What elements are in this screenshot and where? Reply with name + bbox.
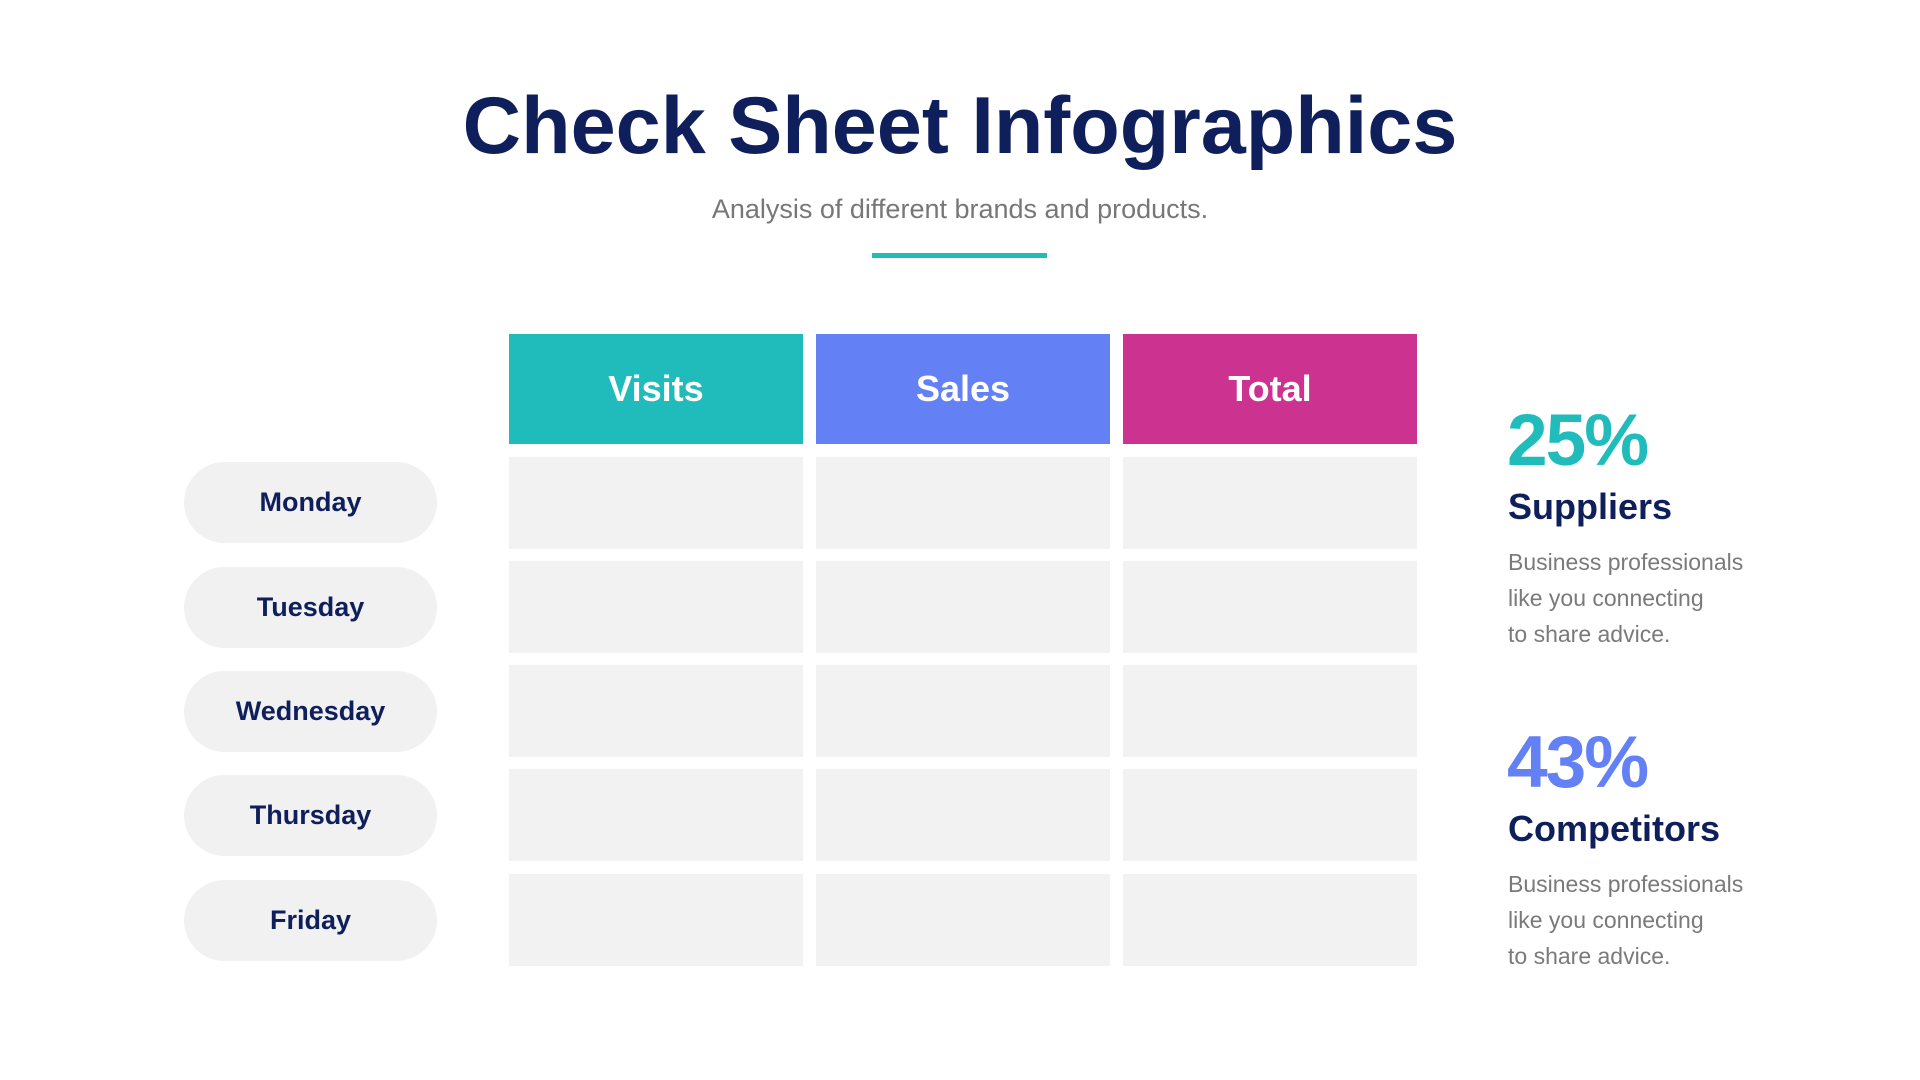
row label: Tuesday: Tuesday xyxy=(257,592,364,622)
row label: Wednesday xyxy=(184,671,437,752)
title: Check Sheet Infographics xyxy=(463,81,1457,171)
table header: Visits: Visits xyxy=(608,368,704,409)
stat text: suppliers xyxy=(1508,549,1743,647)
stat label: Competitors: Competitors xyxy=(1508,808,1720,849)
stat label: Suppliers: Suppliers xyxy=(1508,486,1672,527)
row label: Monday: Monday xyxy=(259,487,362,517)
row label: Thursday xyxy=(184,775,437,856)
subtitle: Analysis of different brands and products. xyxy=(712,194,1208,224)
row label: Wednesday: Wednesday xyxy=(236,696,385,726)
stat: 25%: 25% xyxy=(1507,400,1647,481)
stat text: competitors: to share advice. xyxy=(1508,943,1670,969)
table header: Total xyxy=(1123,334,1417,444)
table header: Sales xyxy=(816,334,1110,444)
stat text: suppliers: Business professionals xyxy=(1508,549,1743,575)
stat text: competitors: Business professionals xyxy=(1508,871,1743,897)
stat text: competitors xyxy=(1508,871,1743,969)
table header: Total: Total xyxy=(1228,368,1312,409)
stat: 43%: 43% xyxy=(1507,722,1647,803)
underline accent xyxy=(872,253,1047,258)
row label: Friday xyxy=(184,880,437,961)
stat text: suppliers: to share advice. xyxy=(1508,621,1670,647)
row label: Tuesday xyxy=(184,567,437,648)
stat text: suppliers: like you connecting xyxy=(1508,585,1704,611)
stat text: competitors: like you connecting xyxy=(1508,907,1704,933)
table header: Sales: Sales xyxy=(916,368,1010,409)
row label: Thursday: Thursday xyxy=(250,800,371,830)
table header: Visits xyxy=(509,334,803,444)
row label: Monday xyxy=(184,462,437,543)
row label: Friday: Friday xyxy=(270,905,351,935)
